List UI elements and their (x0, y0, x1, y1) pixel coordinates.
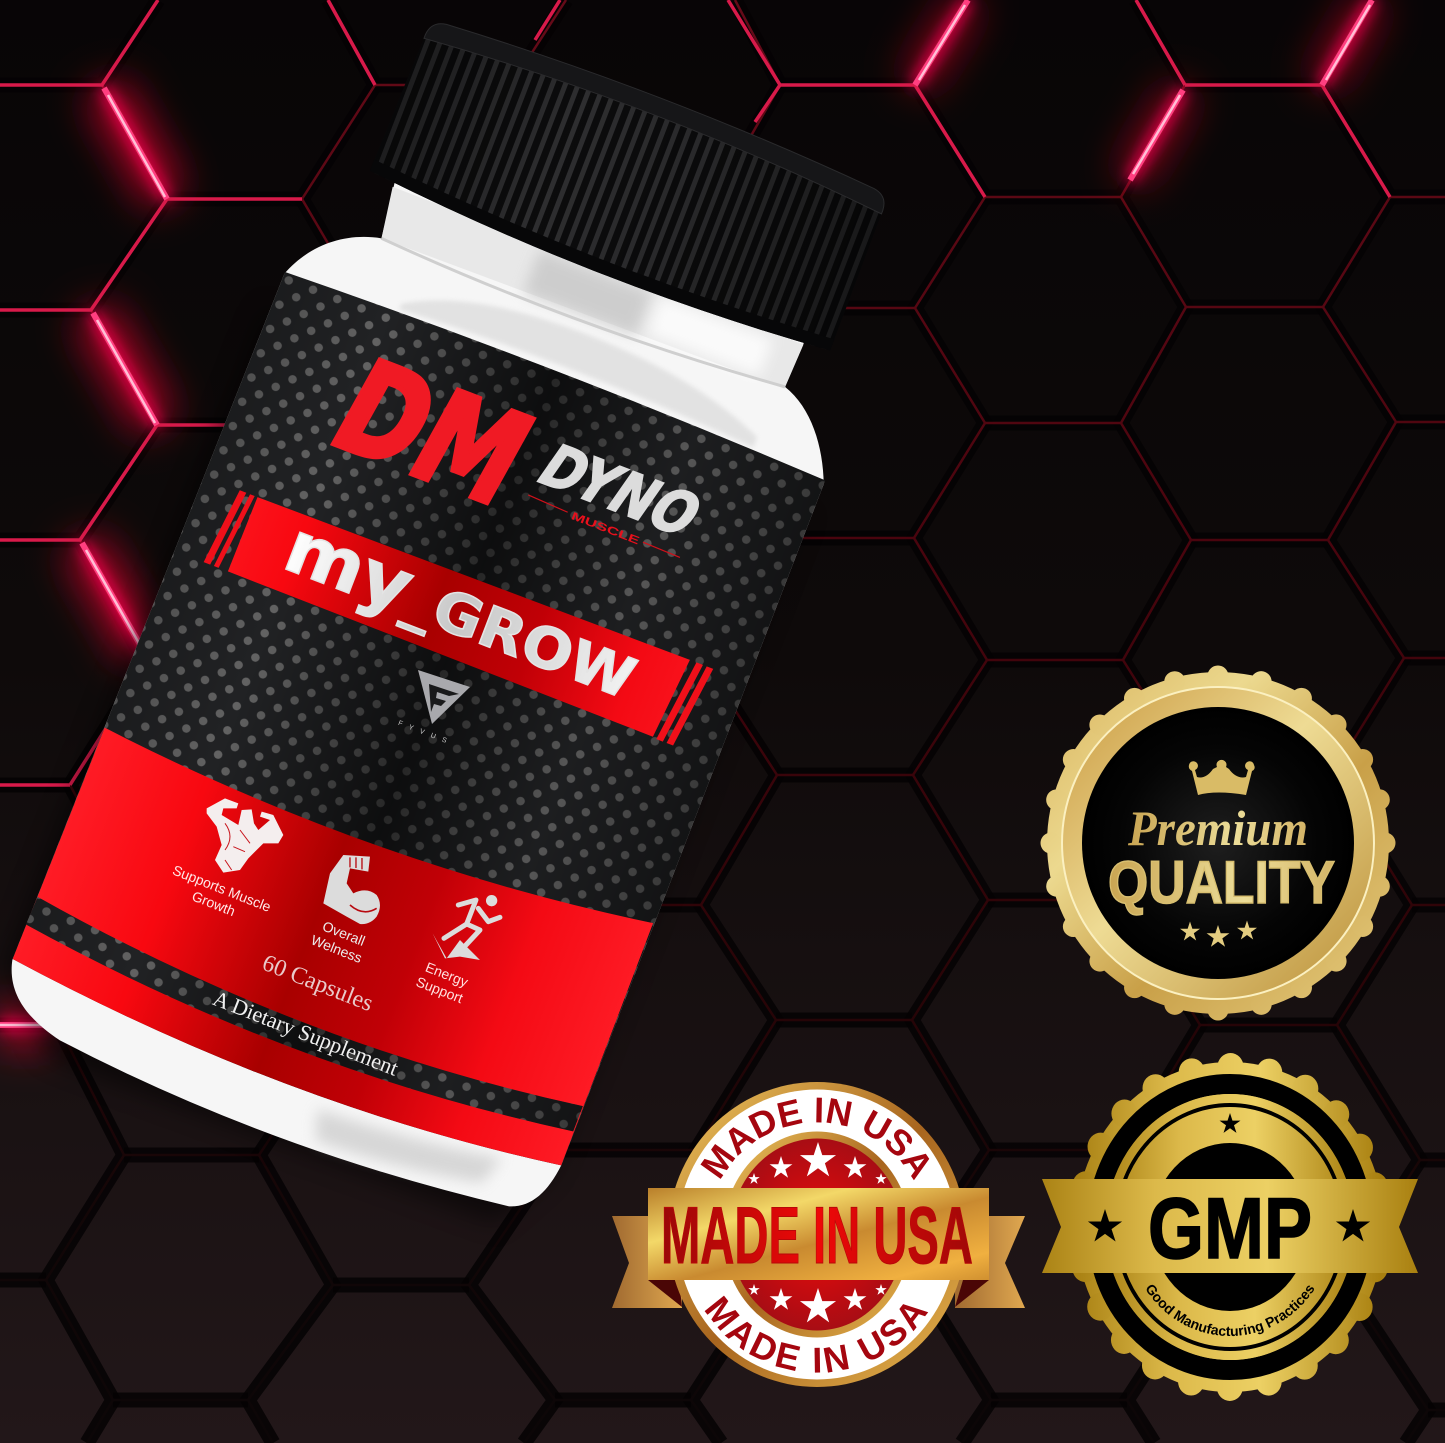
product name banner (203, 478, 716, 749)
benefit: energy support (414, 895, 500, 1006)
cap (365, 10, 893, 360)
icon: muscle man (207, 798, 283, 873)
scalloped gold seal (1076, 1062, 1384, 1392)
badge: made in USA: MADE IN USA (704, 1296, 928, 1373)
benefit: overall wellness (309, 855, 380, 966)
product bottle (0, 0, 932, 1243)
round seal (668, 1082, 966, 1387)
FYVUS mark (418, 670, 470, 724)
MUSCLE sub wordmark: MUSCLE (569, 510, 641, 547)
dietary supplement line: A Dietary Supplement (210, 985, 402, 1081)
product name banner: my_GROW (274, 504, 649, 715)
benefit label: Welness (309, 932, 364, 966)
front ribbon (648, 1188, 989, 1280)
FYVUS name: FYVUS (397, 720, 454, 747)
curved tagline (1127, 1227, 1333, 1336)
dotted strip (19, 896, 583, 1153)
ribbon text: MADE IN USA (661, 1191, 973, 1281)
label dotted background (6, 265, 827, 1187)
DM logo: DM (309, 334, 555, 533)
badge: made in USA (612, 1082, 1025, 1387)
three stars (1180, 920, 1257, 947)
top star (1220, 1113, 1240, 1133)
bottle shadow (0, 306, 804, 1241)
neck and shoulder shading (352, 187, 803, 451)
GMP wordmark: GMP (1148, 1181, 1312, 1277)
QUALITY wordmark: QUALITY (1108, 849, 1335, 916)
badge: GMP: Good Manufacturing Practices (1146, 1284, 1314, 1336)
badge: made in USA: MADE IN USA (700, 1098, 930, 1180)
pink neon glow on hexagon edges (0, 0, 1390, 1025)
ribbon tails (612, 1216, 1025, 1308)
red lower label (6, 714, 654, 1186)
scalloped gold seal (1047, 672, 1389, 1014)
capsule count: 60 Capsules (259, 950, 377, 1017)
ribbon stars (1088, 1209, 1370, 1242)
icon: flexed arm (323, 855, 380, 924)
benefit label: Supports Muscle (170, 862, 273, 915)
white stars (748, 1142, 887, 1322)
benefit label: Support (414, 973, 466, 1006)
icon: crown (1189, 760, 1255, 795)
benefit: supports muscle growth (164, 798, 283, 931)
badge: GMP (1042, 1053, 1418, 1401)
bottom shading (306, 1090, 502, 1205)
arc text top (707, 1122, 927, 1234)
Premium script: Premium (1127, 800, 1308, 856)
ribbon (1042, 1179, 1418, 1273)
bottle body (0, 152, 870, 1236)
DYNO wordmark: DYNO (524, 433, 715, 549)
arc text bottom (683, 1234, 951, 1372)
icon: runner (433, 895, 500, 960)
MUSCLE sub wordmark (525, 493, 682, 563)
benefit label: Overall (320, 918, 367, 949)
benefit label: Energy (423, 959, 470, 990)
FYVUS logo (397, 670, 470, 747)
badge: premium quality (1047, 672, 1389, 1014)
benefit label: Growth (190, 888, 238, 919)
